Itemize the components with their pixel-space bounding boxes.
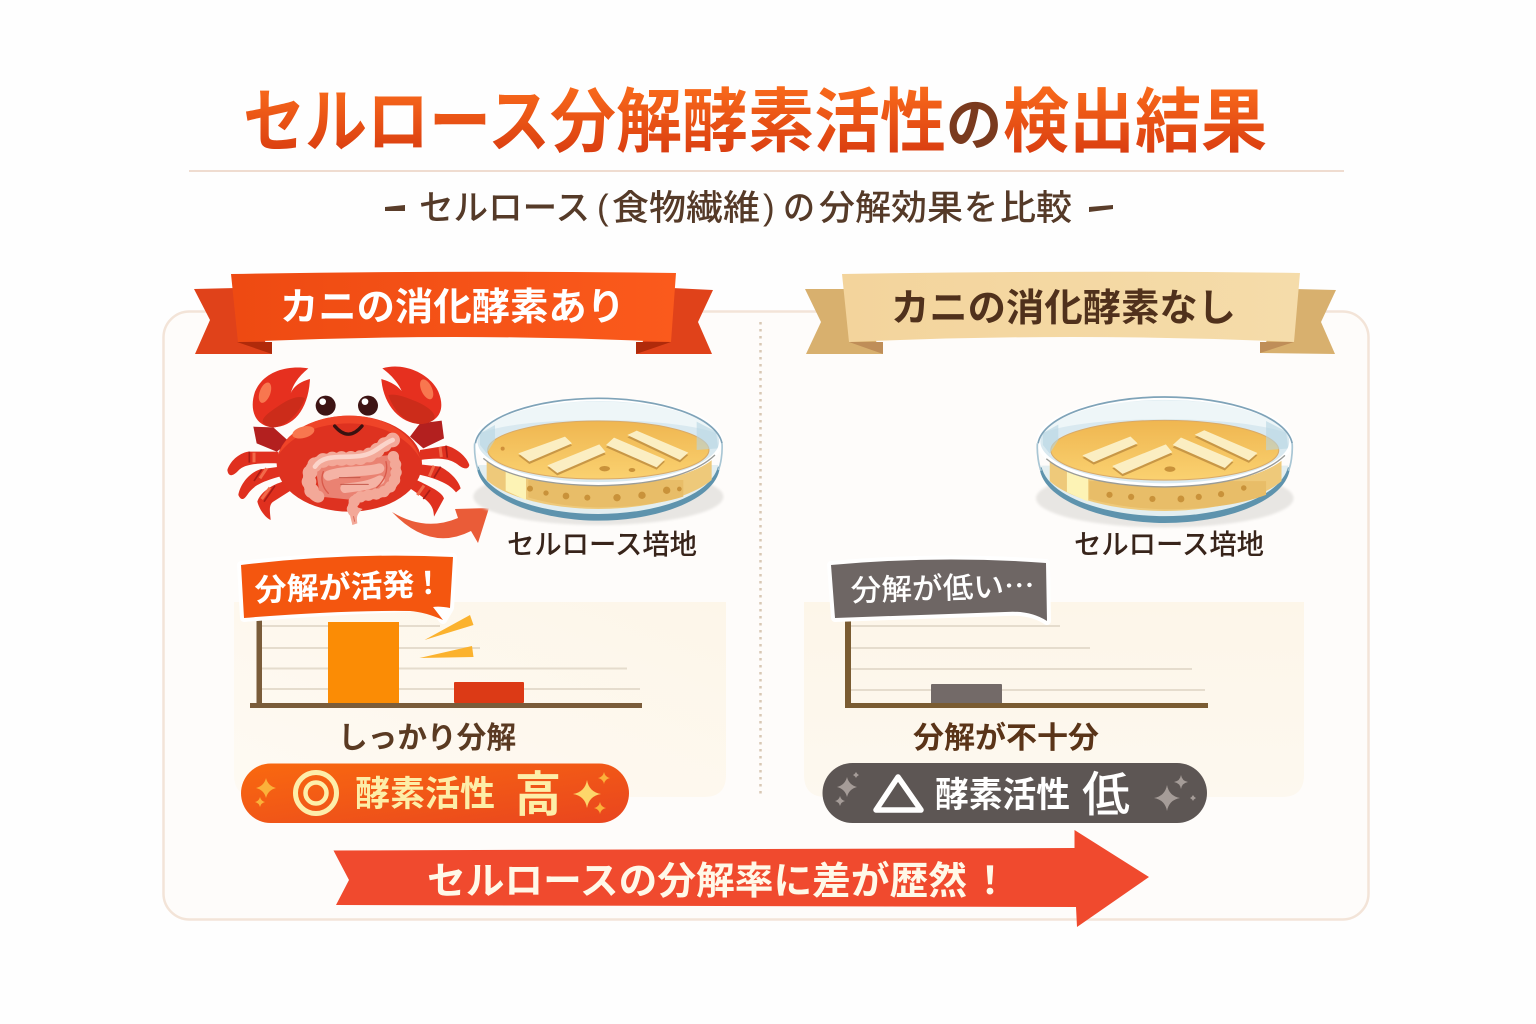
badge: enzyme activity low: 低: [1082, 769, 1130, 822]
title: 検出結果: [1003, 83, 1267, 161]
label: thorough decomposition: しっかり分解: [338, 722, 516, 755]
callout: low decomposition: 分解が低い…: [850, 561, 1035, 610]
arrow banner: conclusion: ！: [971, 861, 1009, 903]
ribbon: with enzyme: カニの消化酵素あり: [280, 287, 625, 329]
subtitle: (: [597, 188, 609, 227]
arrow: crab to dish: [392, 508, 489, 543]
label: cellulose medium left: セルロース培地: [507, 529, 697, 560]
callout: active decomposition: 分解が活発: [254, 567, 415, 608]
ribbon: without enzyme: カニの消化酵素なし: [891, 288, 1236, 330]
badge: enzyme activity low: [822, 763, 1207, 823]
callout: active decomposition: ！: [412, 565, 444, 601]
title: [243, 83, 1267, 161]
main panel: [164, 312, 1368, 920]
subtitle: ): [763, 188, 775, 227]
title: の: [946, 93, 1002, 158]
title: 分解酵素活性: [550, 83, 946, 161]
badge: enzyme activity high: 酵素活性: [355, 775, 495, 814]
chart background: left: [234, 602, 726, 797]
callout: active decomposition: [241, 556, 453, 620]
chart background: right: [804, 602, 1304, 797]
title: セルロース: [243, 83, 550, 161]
subtitle: 比較: [1000, 189, 1072, 228]
bar chart: with enzyme: [250, 615, 642, 708]
ribbon: without enzyme: [805, 272, 1336, 354]
badge: enzyme activity low: 酵素活性: [935, 776, 1070, 815]
badge: enzyme activity high: 高: [515, 769, 561, 822]
subtitle: の: [783, 189, 815, 228]
title underline: [189, 170, 1344, 172]
subtitle: セルロース: [419, 189, 590, 228]
ribbon: with enzyme: [194, 272, 713, 354]
arrow banner: conclusion: セルロースの分解率に差が歴然: [427, 861, 967, 903]
icon: petri dish right: [1036, 397, 1294, 527]
callout: low decomposition: [831, 559, 1047, 621]
divider: [759, 322, 762, 797]
label: cellulose medium right: セルロース培地: [1074, 529, 1264, 560]
icon: petri dish left: [473, 398, 723, 525]
arrow banner: conclusion: [334, 830, 1149, 927]
badge: enzyme activity high: [241, 764, 629, 823]
subtitle: 食物繊維: [612, 189, 760, 228]
subtitle: を: [964, 189, 998, 228]
subtitle: 分解効果: [819, 189, 963, 228]
subtitle: [385, 188, 1113, 228]
icon: crab with intestine: [227, 366, 469, 525]
label: insufficient decomposition: 分解が不十分: [913, 721, 1099, 755]
bar chart: without enzyme: [845, 618, 1208, 708]
